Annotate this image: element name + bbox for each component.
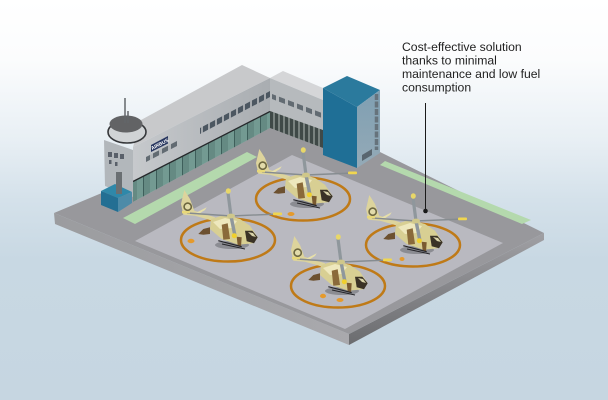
callout text: maintenance and low fuel	[402, 67, 540, 81]
tower deck	[108, 121, 146, 143]
rear wing wall	[270, 78, 323, 148]
landing ring: left	[181, 218, 275, 262]
helicopter: front	[291, 234, 392, 295]
green strip: right	[380, 161, 531, 224]
callout leader line	[423, 103, 428, 213]
helicopter: left	[181, 188, 282, 249]
rear wing windows	[272, 94, 322, 118]
landing ring: right	[366, 224, 460, 266]
long wall	[133, 78, 270, 202]
tower shaft	[104, 140, 133, 197]
long wall windows	[200, 91, 270, 134]
long wall glazing	[133, 112, 270, 202]
long roof	[133, 65, 270, 147]
landing ring: rear	[256, 178, 350, 220]
tower entrance	[101, 184, 132, 198]
airbus sign: AIRBUS	[150, 137, 171, 152]
green strip: left	[123, 152, 257, 224]
helipad apron	[135, 155, 503, 329]
blue tower block	[323, 76, 380, 168]
callout text: consumption	[402, 80, 471, 94]
helicopter: right	[366, 193, 467, 254]
landing ring: front	[291, 264, 385, 308]
tower antennas	[125, 98, 128, 123]
callout text: Cost-effective solution	[402, 40, 522, 54]
callout text: thanks to minimal	[402, 54, 497, 68]
airfield platform	[54, 110, 544, 345]
control tower	[101, 98, 146, 212]
rear wing roof	[270, 71, 323, 100]
pad markers	[188, 212, 404, 302]
tower windows	[108, 152, 124, 166]
hangar building	[133, 65, 323, 202]
rear wing hangar doors	[270, 111, 323, 148]
helicopter: rear	[256, 147, 357, 208]
